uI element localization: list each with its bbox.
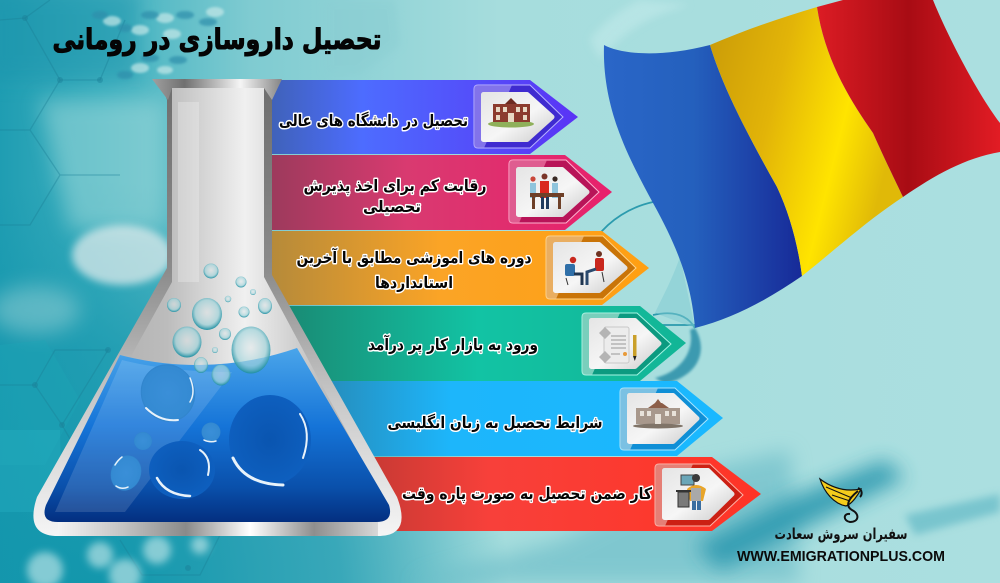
band 3 bbox=[270, 231, 649, 305]
flag blue stripe bbox=[604, 45, 802, 328]
neck highlight bbox=[178, 102, 199, 282]
label 5: شرایط تحصیل به زبان انگلیسی bbox=[388, 413, 602, 432]
Romanian flag bbox=[604, 0, 1000, 328]
icon plate 5 bbox=[620, 388, 708, 450]
icon plate 6 bbox=[655, 464, 743, 526]
logo emblem: yellow wing and swan bbox=[820, 479, 862, 522]
Erlenmeyer flask bbox=[33, 79, 402, 536]
icon: university building bbox=[488, 98, 534, 128]
icon: scroll and pen bbox=[599, 327, 636, 363]
liquid highlight bbox=[55, 360, 232, 512]
band 2 bbox=[270, 155, 612, 230]
label 3 bbox=[296, 247, 532, 292]
flask rim bbox=[152, 79, 282, 100]
flag yellow stripe bbox=[710, 7, 903, 276]
label 3: دوره های اموزشی مطابق با آخرین bbox=[296, 247, 532, 267]
arrow 1: universities bbox=[270, 80, 578, 154]
title: تحصیل داروسازی در رومانی bbox=[52, 23, 382, 56]
arrow 6: part-time work bbox=[270, 457, 761, 531]
arrow 3: up-to-date courses bbox=[270, 231, 649, 305]
icon: people around table bbox=[530, 174, 564, 209]
icon plate 3 bbox=[546, 236, 636, 299]
website URL: WWW.EMIGRATIONPLUS.COM bbox=[737, 548, 945, 565]
label 2: تحصیلی bbox=[363, 197, 421, 216]
logo Persian name: سفیران سروش سعادت bbox=[774, 525, 908, 543]
label 2: رقابت کم برای اخذ پذیرش bbox=[304, 176, 486, 196]
band 1 bbox=[270, 80, 578, 154]
icon plate 2 bbox=[509, 160, 599, 223]
icon: grey building bbox=[633, 399, 683, 428]
label 2 bbox=[304, 176, 486, 216]
bubbles in liquid bbox=[106, 357, 311, 499]
icon plate 1 bbox=[474, 85, 563, 148]
label 3: استانداردها bbox=[375, 273, 453, 292]
label 4: ورود به بازار کار پر درآمد bbox=[368, 334, 538, 355]
arrow 4: job market bbox=[270, 306, 686, 381]
arrow 2: low competition bbox=[270, 155, 612, 230]
flask bottom band bbox=[58, 522, 378, 536]
band 4 bbox=[270, 306, 686, 381]
logo bbox=[737, 479, 945, 565]
arrow 5: English instruction bbox=[270, 381, 723, 456]
band 6 bbox=[270, 457, 761, 531]
flask inner glass bbox=[48, 88, 387, 522]
flag red stripe bbox=[817, 0, 1000, 197]
band 5 bbox=[270, 381, 723, 456]
flask metal outline bbox=[33, 88, 402, 536]
label 1: تحصیل در دانشگاه های عالی bbox=[279, 111, 468, 130]
label 6: کار ضمن تحصیل به صورت پاره وقت bbox=[402, 484, 653, 504]
icon plate 4 bbox=[582, 313, 671, 375]
bubbles above liquid bbox=[167, 264, 272, 386]
icon: two seated people bbox=[565, 251, 604, 285]
icon: person at desk bbox=[676, 474, 706, 510]
liquid bbox=[44, 348, 390, 522]
